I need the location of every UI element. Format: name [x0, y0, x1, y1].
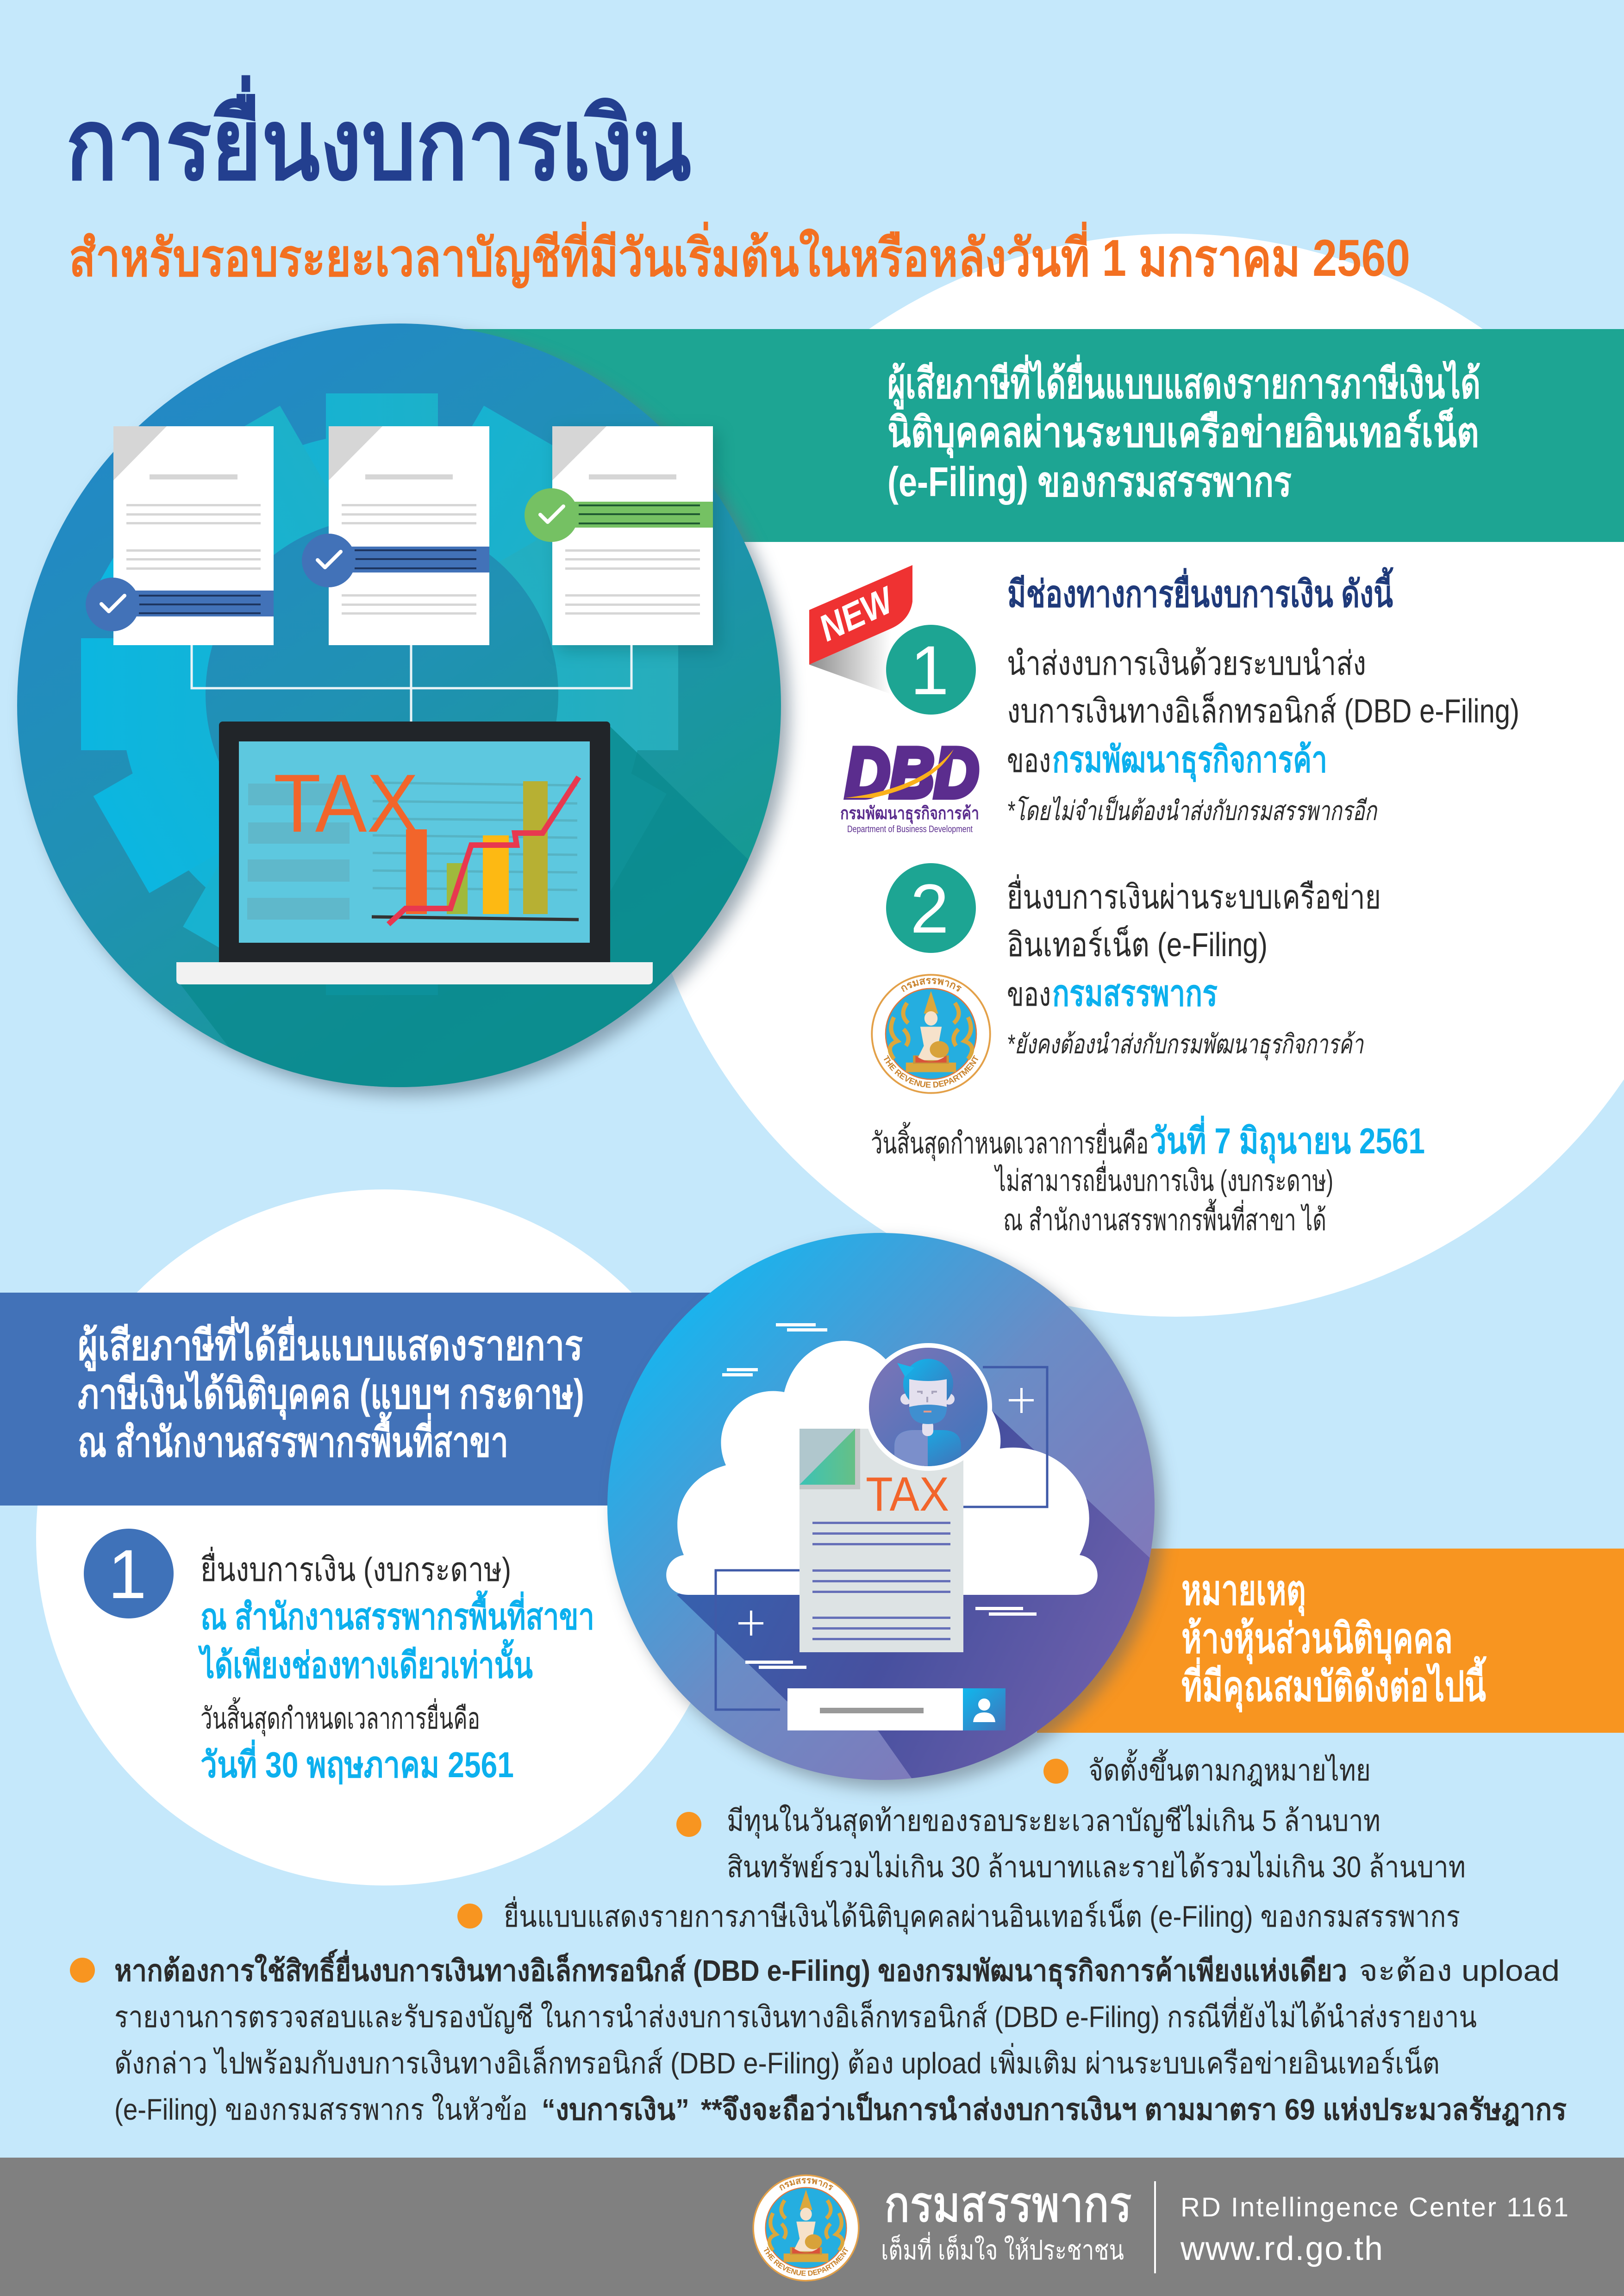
deadline notice: e-Filing: วันสิ้นสุดกำหนดเวลาการยื่นคือ	[871, 1122, 1149, 1161]
bullet list: qualifications: จัดตั้งขึ้นตามกฎหมายไทย	[1088, 1749, 1371, 1787]
connector lines	[192, 645, 631, 722]
channel 1 text: ของ	[1007, 742, 1051, 779]
channel 2 text: อินเทอร์เน็ต (e-Filing)	[1007, 925, 1268, 964]
paper channel text: ยื่นงบการเงิน (งบกระดาษ)	[200, 1547, 511, 1588]
search bar	[787, 1688, 1006, 1730]
panel: note heading banner	[1037, 1549, 1624, 1733]
illustration: cloud tax circle	[607, 1233, 1167, 1805]
number badge: paper channel: 1	[108, 1535, 147, 1613]
deadline notice: e-Filing: ไม่สามารถยื่นงบการเงิน (งบกระดาษ)	[993, 1160, 1333, 1197]
footer: กรมสรรพากร	[884, 2176, 1132, 2232]
DBD logo: DBD	[845, 734, 979, 812]
channel 2 text: *ยังคงต้องนำส่งกับกรมพัฒนาธุรกิจการค้า	[1007, 1029, 1364, 1061]
footer	[0, 2158, 1624, 2296]
paragraph: DBD e-Filing condition: (e-Filing) ของกรมสรรพากร ในหัวข้อ	[114, 2093, 528, 2126]
channel 2 text	[1007, 874, 1381, 1061]
panel: note heading banner: ห้างหุ้นส่วนนิติบุคคล	[1181, 1616, 1453, 1665]
frame outlines	[716, 1367, 1047, 1710]
panel: paper filing heading banner: ภาษีเงินได้นิติบุคคล (แบบฯ กระดาษ)	[78, 1370, 584, 1420]
paper channel text: วันที่ 30 พฤษภาคม 2561	[200, 1739, 514, 1785]
seal: Revenue Department: กรมสรรพากร	[898, 974, 964, 994]
illustration: tax laptop circle	[17, 324, 789, 1111]
number badge 2: 2	[910, 870, 949, 947]
deadline notice: e-Filing	[871, 1115, 1425, 1237]
footer: เต็มที่ เต็มใจ ให้ประชาชน	[881, 2232, 1124, 2265]
paragraph: DBD e-Filing condition	[70, 1949, 1567, 2126]
paragraph: DBD e-Filing condition: หากต้องการใช้สิทธิ์ยื่นงบการเงินทางอิเล็กทรอนิกส์ (DBD e-Filing) ของกรมพัฒนาธุรกิจการค้าเพียงแห่งเดียว	[114, 1949, 1347, 1989]
white circle: lower left	[36, 1189, 732, 1885]
panel: e-Filing heading banner: นิติบุคคลผ่านระบบเครือข่ายอินเทอร์เน็ต	[887, 407, 1479, 459]
paragraph: DBD e-Filing condition: จะต้อง upload	[1359, 1954, 1560, 1987]
NEW ribbon	[809, 565, 912, 694]
paragraph: DBD e-Filing condition: “งบการเงิน”	[542, 2093, 689, 2126]
paper channel text: ณ สำนักงานสรรพากรพื้นที่สาขา	[200, 1590, 594, 1637]
DBD logo: กรมพัฒนาธุรกิจการค้า	[840, 804, 979, 824]
tax label: TAX	[274, 757, 418, 849]
number badge: paper channel	[84, 1529, 174, 1618]
paper channel text	[198, 1547, 594, 1785]
deadline notice: e-Filing: ณ สำนักงานสรรพากรพื้นที่สาขา ได้	[1003, 1199, 1326, 1237]
number badge 1: 1	[910, 631, 949, 709]
channel 1 text: *โดยไม่จำเป็นต้องนำส่งกับกรมสรรพากรอีก	[1007, 795, 1378, 826]
document 1	[86, 426, 274, 645]
paper channel text: วันสิ้นสุดกำหนดเวลาการยื่นคือ	[200, 1697, 480, 1736]
channel 2 text: กรมสรรพากร	[1052, 973, 1218, 1014]
bar chart	[372, 777, 579, 924]
title: การยื่นงบการเงิน	[66, 75, 691, 200]
panel: paper filing heading banner: ผู้เสียภาษีที่ได้ยื่นแบบแสดงรายการ	[78, 1316, 583, 1371]
bullet list: qualifications: ยื่นแบบแสดงรายการภาษีเงินได้นิติบุคคลผ่านอินเทอร์เน็ต (e-Filing) ของกรมสรรพากร	[504, 1896, 1460, 1935]
laptop	[176, 722, 653, 984]
channel 1 text: งบการเงินทางอิเล็กทรอนิกส์ (DBD e-Filing)	[1007, 691, 1519, 730]
paragraph: DBD e-Filing condition: รายงานการตรวจสอบและรับรองบัญชี ในการนำส่งงบการเงินทางอิเล็กทรอนิกส์ (DBD e-Filing) กรณีที่ยังไม่ได้นำส่งรายงาน	[114, 1997, 1477, 2034]
footer seal: กรมสรรพากร	[777, 2175, 835, 2193]
footer: RD Intellingence Center 1161	[1181, 2192, 1568, 2222]
panel: note heading banner: ที่มีคุณสมบัติดังต่อไปนี้	[1181, 1656, 1487, 1713]
seal: Revenue Department: THE REVENUE DEPARTMENT	[881, 1054, 981, 1089]
heading: channels: มีช่องทางการยื่นงบการเงิน ดังนี้	[1007, 567, 1394, 615]
tax document: TAX	[866, 1468, 949, 1521]
NEW ribbon: NEW	[813, 579, 902, 649]
paragraph: DBD e-Filing condition: **จึงจะถือว่าเป็นการนำส่งงบการเงินฯ ตามมาตรา 69 แห่งประมวลรัษฎากร	[701, 2092, 1567, 2126]
DBD logo: Department of Business Development	[847, 824, 973, 834]
number badge 2	[886, 863, 976, 953]
tax document	[800, 1429, 963, 1652]
panel: note heading banner: หมายเหตุ	[1181, 1568, 1306, 1617]
paragraph: DBD e-Filing condition: ดังกล่าว ไปพร้อมกับงบการเงินทางอิเล็กทรอนิกส์ (DBD e-Filing) ต้อง upload เพิ่มเติม ผ่านระบบเครือข่ายอินเทอร์เน็ต	[114, 2043, 1440, 2080]
panel: e-Filing heading banner: (e-Filing) ของกรมสรรพากร	[887, 459, 1292, 505]
paper channel text: ได้เพียงช่องทางเดียวเท่านั้น	[198, 1639, 533, 1686]
bullet list: qualifications: สินทรัพย์รวมไม่เกิน 30 ล้านบาทและรายได้รวมไม่เกิน 30 ล้านบาท	[727, 1850, 1466, 1884]
channel 2 text: ของ	[1007, 976, 1051, 1013]
avatar	[864, 1343, 992, 1471]
panel: paper filing heading banner: ณ สำนักงานสรรพากรพื้นที่สาขา	[78, 1412, 508, 1466]
document 3	[525, 426, 718, 651]
channel 2 text: ยื่นงบการเงินผ่านระบบเครือข่าย	[1007, 874, 1381, 916]
seal: Revenue Department	[872, 974, 990, 1093]
channel 1 text: กรมพัฒนาธุรกิจการค้า	[1052, 739, 1327, 782]
number badge 1	[886, 625, 976, 715]
bullet list: qualifications	[457, 1749, 1466, 1935]
panel: e-Filing heading banner	[463, 329, 1624, 542]
channel 1 text	[1007, 645, 1519, 826]
bullet list: qualifications: มีทุนในวันสุดท้ายของรอบระยะเวลาบัญชีไม่เกิน 5 ล้านบาท	[727, 1804, 1380, 1839]
small plus marks and dashes	[722, 1323, 1037, 1669]
cloud	[666, 1341, 1098, 1595]
footer: www.rd.go.th	[1180, 2230, 1383, 2267]
DBD logo	[840, 734, 979, 834]
white circle: upper right	[634, 234, 1624, 1317]
footer seal	[753, 2175, 859, 2281]
deadline notice: e-Filing: วันที่ 7 มิถุนายน 2561	[1150, 1115, 1425, 1164]
channel 1 text: นำส่งงบการเงินด้วยระบบนำส่ง	[1007, 645, 1366, 682]
panel: paper filing heading banner	[0, 1293, 787, 1506]
footer seal: THE REVENUE DEPARTMENT	[762, 2246, 850, 2278]
document 2	[302, 426, 489, 645]
subtitle: สำหรับรอบระยะเวลาบัญชีที่มีวันเริ่มต้นในหรือหลังวันที่ 1 มกราคม 2560	[69, 221, 1410, 289]
